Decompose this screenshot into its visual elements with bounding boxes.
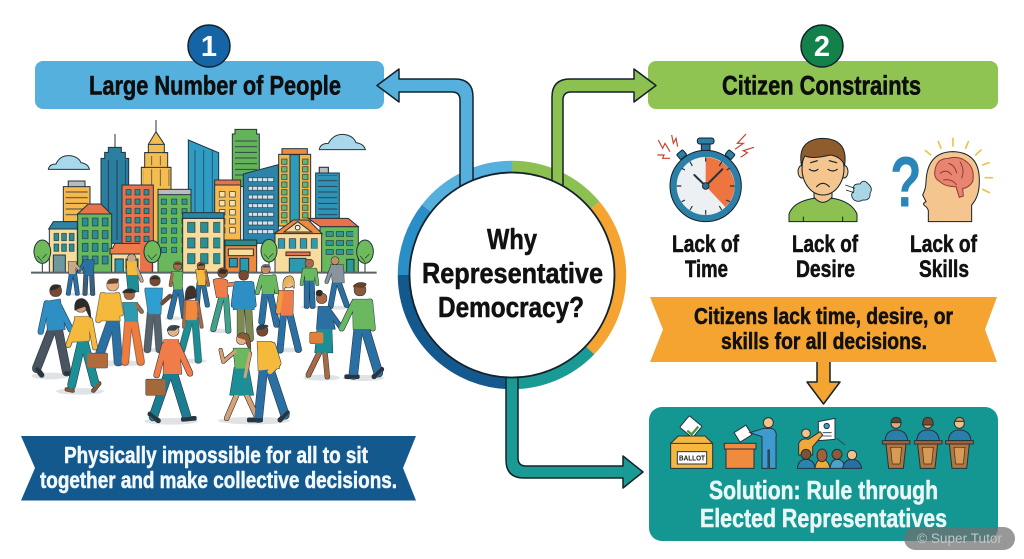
hub ring segments <box>404 167 620 383</box>
header text: Citizen Constraints <box>722 70 921 100</box>
panel: solution <box>649 407 998 541</box>
label: lack of time: Lack of <box>672 231 740 258</box>
illustration: crowd of people <box>32 254 384 425</box>
label: lack of desire: Desire <box>796 256 855 283</box>
panel: citizen constraints header <box>648 25 998 109</box>
hub title: Why <box>487 224 537 256</box>
ribbon text: together and make collective decisions. <box>40 467 397 493</box>
icon: candidate presenting <box>797 418 862 468</box>
ribbon: physically impossible <box>21 436 416 500</box>
back towers <box>63 120 339 243</box>
header bar <box>35 61 384 109</box>
front left people <box>37 285 107 391</box>
front centre people <box>146 325 287 421</box>
icon: question mark and brain: ? <box>890 142 922 222</box>
ribbon text: Citizens lack time, desire, or <box>694 303 953 329</box>
trees <box>34 239 373 273</box>
solution text: Elected Representatives <box>700 503 947 533</box>
hub title: Democracy? <box>438 292 584 324</box>
ground shadows <box>32 293 384 425</box>
mid row people <box>98 276 298 362</box>
ribbon: citizens lack <box>650 297 997 362</box>
ribbon text: Physically impossible for all to sit <box>64 442 368 468</box>
label: lack of desire: Lack of <box>792 231 859 258</box>
ground line <box>31 270 377 276</box>
panel: large number of people header <box>35 25 384 109</box>
badge 2: 2 <box>814 31 830 63</box>
icon: stopwatch <box>657 134 754 222</box>
watermark <box>904 527 1015 550</box>
icon: voter casting ballot <box>724 418 776 468</box>
watermark: © Super Tutor <box>917 531 1002 546</box>
badge 1 <box>188 25 230 67</box>
arrow: hub to solution <box>506 370 643 488</box>
ribbon text: skills for all decisions. <box>721 328 927 354</box>
label: lack of skills: Lack of <box>910 231 978 258</box>
icon: three representatives at podiums <box>882 417 973 468</box>
arrow: hub to citizen constraints <box>552 69 656 192</box>
icon: tired person <box>789 138 871 222</box>
mid buildings <box>122 180 241 273</box>
icon: ballot box: BALLOT <box>679 455 706 462</box>
badge 2 <box>801 25 843 67</box>
icon: question mark and brain <box>890 138 992 222</box>
illustration: city skyline <box>31 120 377 273</box>
badge 1: 1 <box>201 31 217 63</box>
arrow: ribbon to solution <box>807 362 840 404</box>
hub title: Representative <box>422 258 603 290</box>
solution text: Solution: Rule through <box>709 475 938 505</box>
clouds <box>48 134 365 169</box>
back row people <box>68 254 347 338</box>
header bar <box>648 61 998 109</box>
arrow: hub to large number of people <box>377 69 473 192</box>
icon: ballot box <box>671 416 713 468</box>
front buildings <box>49 204 358 273</box>
central hub disc <box>410 172 614 378</box>
front right people <box>308 283 382 377</box>
label: lack of time: Time <box>685 256 728 283</box>
label: lack of skills: Skills <box>919 256 969 283</box>
hub disc <box>410 172 614 378</box>
header text: Large Number of People <box>89 70 341 100</box>
